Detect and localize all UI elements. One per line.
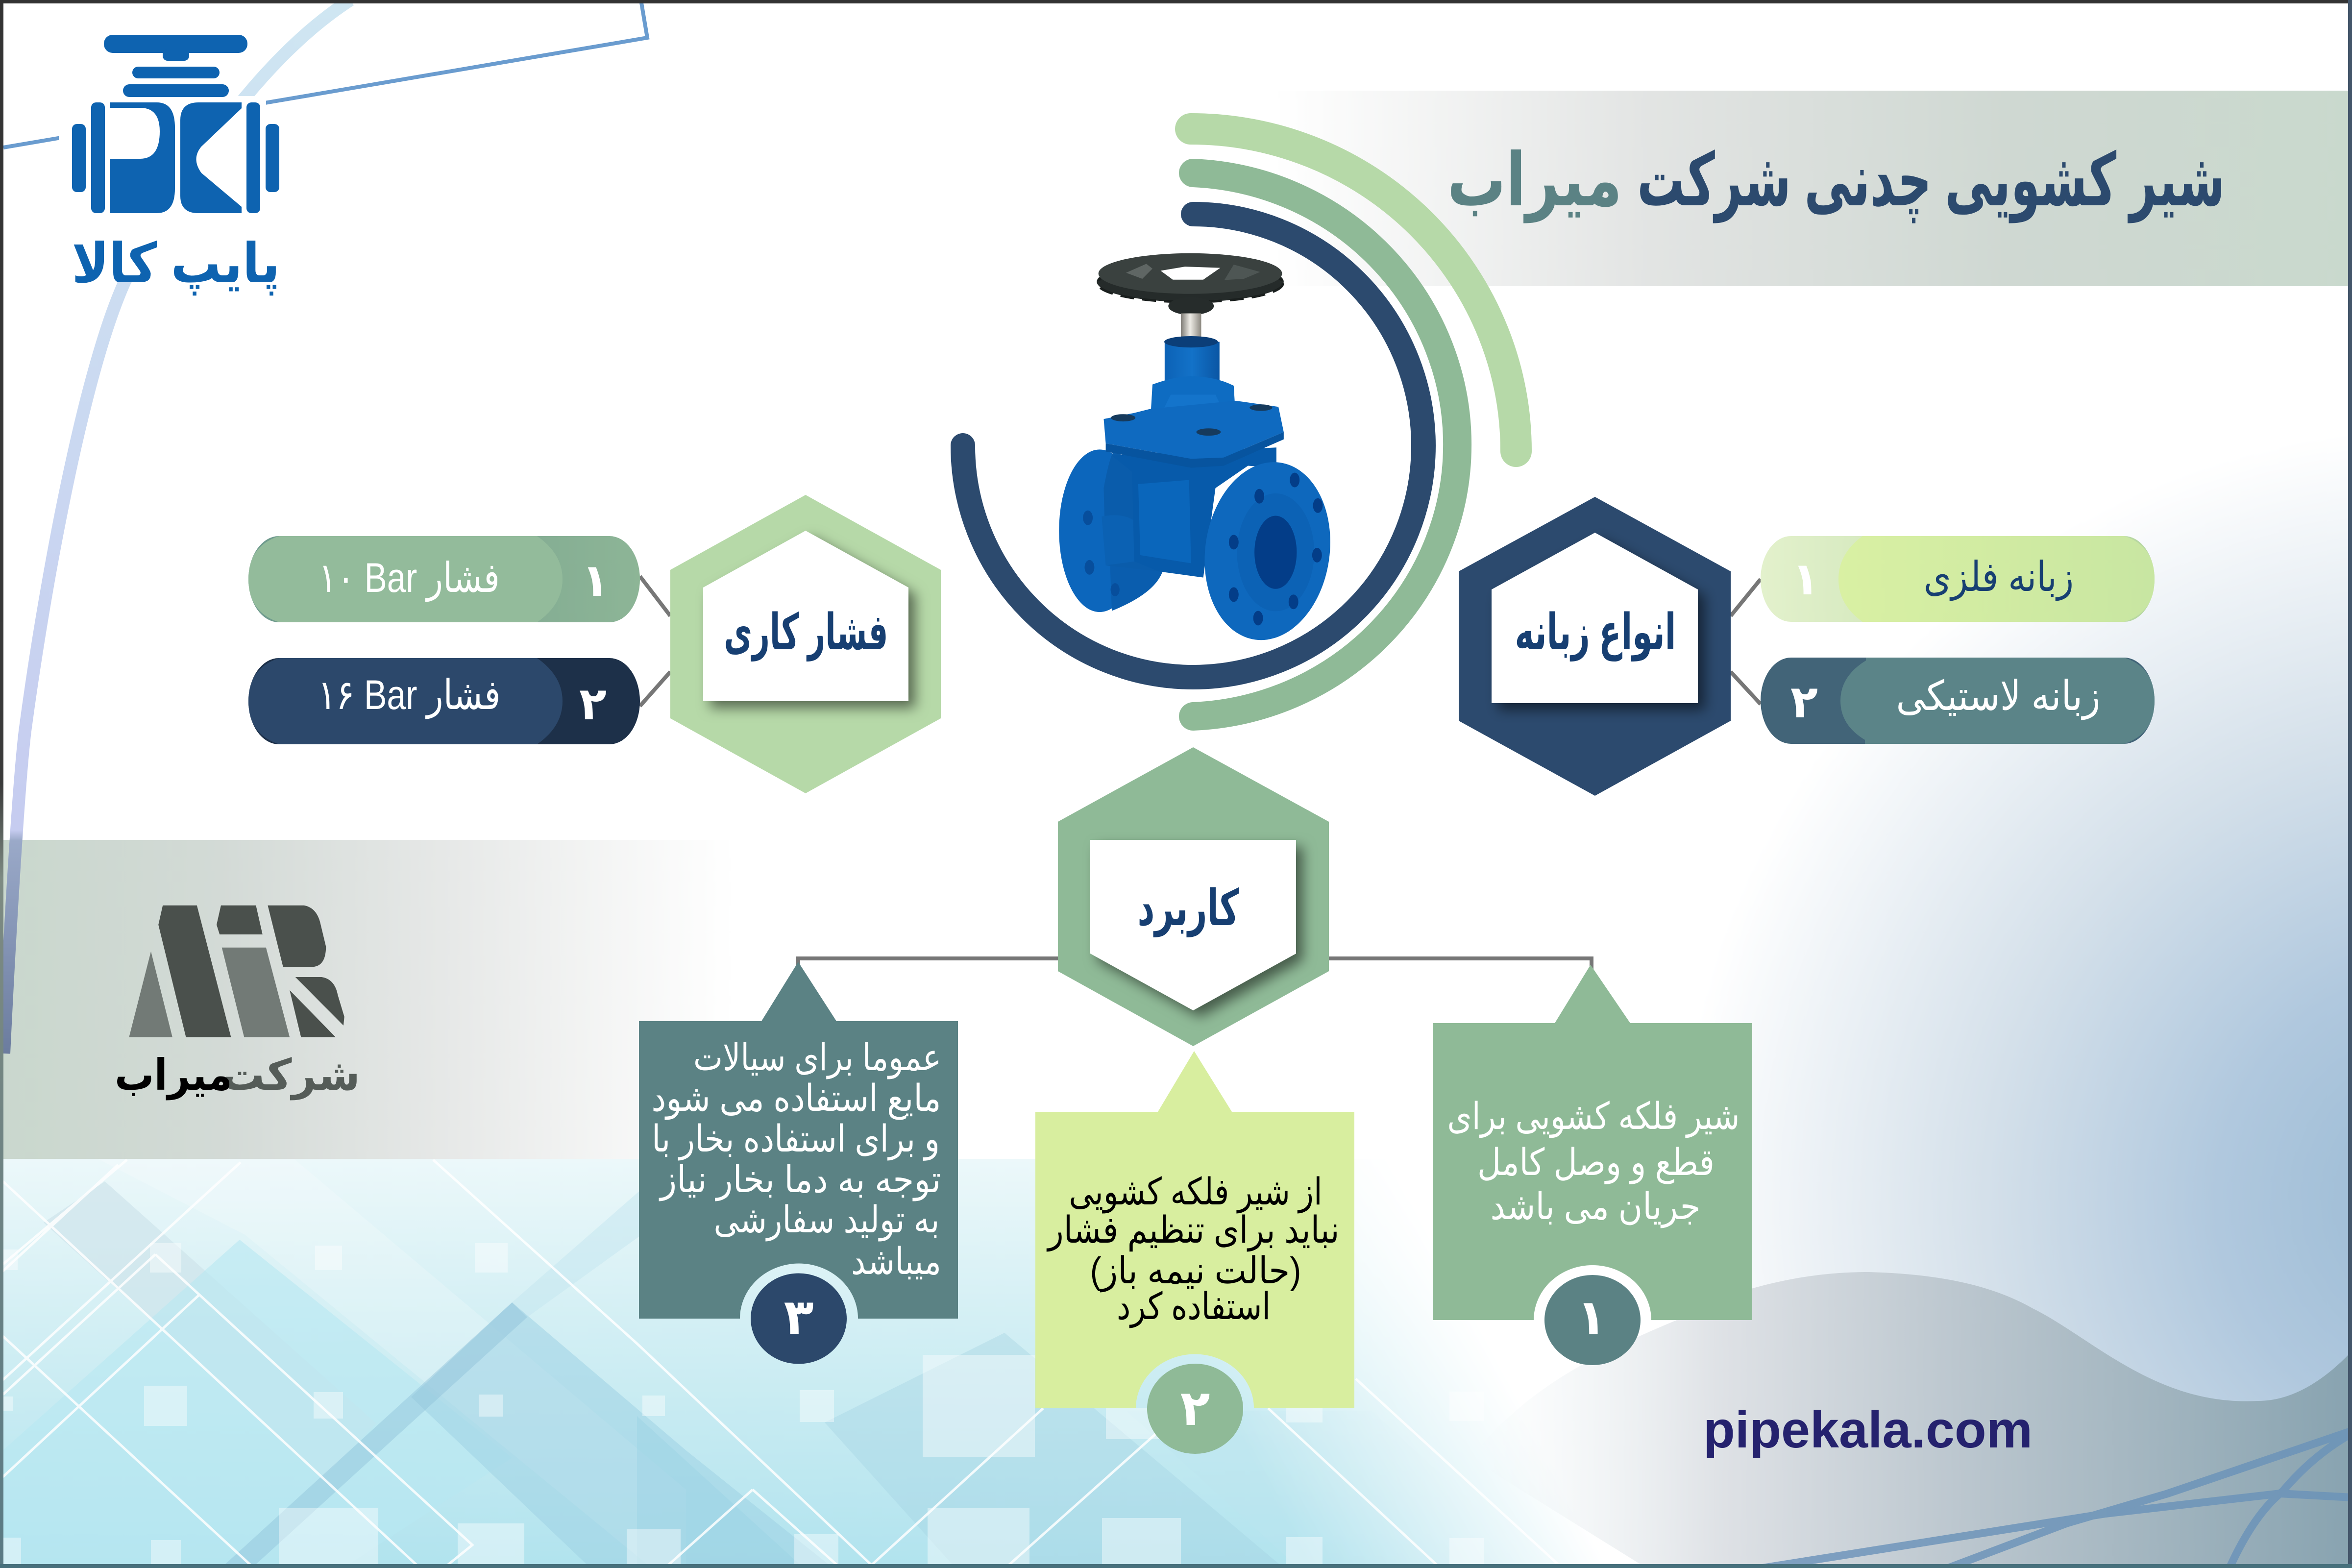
number badge 2 <box>1147 1364 1243 1454</box>
number badge 3 <box>751 1273 847 1364</box>
number badge 3: ۳ <box>784 1290 814 1345</box>
background: geometric light-blue pattern <box>3 1159 1573 1564</box>
hexagon label box <box>703 531 908 701</box>
hexagon label box <box>1090 840 1296 1010</box>
logo wordmark: پایپ کالا <box>72 233 280 296</box>
card text: قطع و وصل کامل <box>1477 1142 1715 1184</box>
hexagon heading: کاربرد <box>1138 880 1239 937</box>
pill: metal disc <box>1761 536 2155 622</box>
panel: application hexagon <box>1058 747 1329 1046</box>
valve body <box>1059 336 1342 648</box>
card text: میباشد <box>851 1241 941 1282</box>
pill: 16 bar: ۲ <box>579 679 607 729</box>
card text: عموما برای سیالات <box>693 1037 941 1079</box>
title: teal part: میراب <box>1447 139 1622 223</box>
pill: metal disc: ۱ <box>1792 554 1819 604</box>
panel: working pressure pills <box>248 536 640 744</box>
card text <box>652 1037 941 1282</box>
pill: 10 bar: ۱ <box>582 556 609 606</box>
logo: Mirab wordmark <box>115 1051 360 1100</box>
logo: Mirab company <box>129 906 344 1037</box>
panel: working pressure hexagon <box>670 495 941 793</box>
card text: استفاده کرد <box>1117 1286 1271 1328</box>
pill: 10 bar <box>248 536 640 622</box>
logo: Mirab wordmark: میراب <box>115 1051 232 1100</box>
panel: disc types pills <box>1761 536 2155 744</box>
background: blue network lines in lower right <box>1763 1431 2352 1568</box>
pill: rubber disc <box>1761 658 2155 744</box>
pill: rubber disc: زبانه لاستیکی <box>1896 673 2100 720</box>
logo: pipekala <box>72 35 280 296</box>
central arcs <box>963 129 1516 716</box>
card text: مایع استفاده می شود <box>652 1078 941 1120</box>
background: grey wave in lower right <box>1470 1272 2352 1568</box>
title <box>1447 139 2225 223</box>
card text: جریان می باشد <box>1491 1186 1700 1228</box>
connector lines <box>640 576 1761 972</box>
number badge 1 <box>1544 1275 1641 1365</box>
decorative thin blue line at top left <box>3 0 647 147</box>
pill: 16 bar <box>248 658 640 744</box>
card text: توجه به دما بخار نیاز <box>659 1159 941 1201</box>
logo: Mirab wordmark: شرکت <box>222 1051 360 1100</box>
number badge 1: ۱ <box>1576 1290 1607 1345</box>
card text: نباید برای تنظیم فشار <box>1046 1209 1340 1252</box>
hexagon label box <box>1492 533 1698 703</box>
hexagon heading: انواع زبانه <box>1515 604 1676 662</box>
card 2: caution note <box>1035 1051 1354 1454</box>
pill: rubber disc: ۲ <box>1790 677 1818 727</box>
number badge 2: ۲ <box>1180 1381 1210 1436</box>
card 1: purpose note <box>1433 965 1752 1365</box>
logo white backing <box>59 96 266 282</box>
card text <box>1046 1171 1340 1328</box>
valve illustration <box>1059 253 1342 648</box>
pill: 16 bar: فشار Bar ‏۱۶ <box>318 672 501 719</box>
pill: metal disc: زبانه فلزی <box>1924 554 2074 601</box>
decorative pale curve at left <box>4 0 350 1054</box>
card text: (حالت نیمه باز) <box>1090 1250 1301 1293</box>
card text: و برای استفاده بخار با <box>652 1118 940 1161</box>
card text: به تولید سفارشی <box>713 1199 940 1242</box>
valve stem <box>1181 314 1201 340</box>
website url: pipekala.com <box>1703 1401 2033 1459</box>
pill: 10 bar: فشار Bar ‏۱۰ <box>318 555 500 602</box>
card 3: use for liquids <box>639 962 958 1364</box>
hexagon heading: فشار کاری <box>724 604 888 662</box>
card text: از شیر فلکه کشویی <box>1069 1171 1322 1214</box>
panel: disc types hexagon <box>1459 497 1731 796</box>
card text: شیر فلکه کشویی برای <box>1447 1096 1740 1138</box>
valve handwheel <box>1097 253 1284 315</box>
background: top-right grey title band <box>1274 91 2352 286</box>
background: blue glow on the right side <box>1617 392 2352 1568</box>
card text <box>1447 1096 1740 1228</box>
background: left grey band behind company logo <box>0 840 735 1159</box>
